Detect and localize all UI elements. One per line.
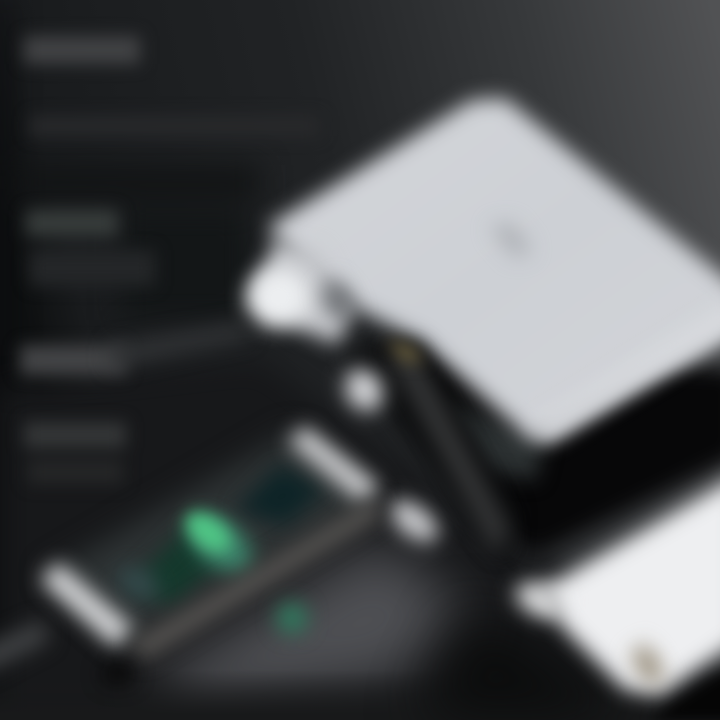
- paragraph block 4: [28, 460, 123, 484]
- phone shadow spot: [102, 664, 134, 684]
- charger plug: [246, 240, 360, 345]
- black corner: [650, 660, 720, 720]
- phone end cap right: [288, 425, 380, 505]
- diagonal cable with gold connector: [337, 340, 515, 560]
- second device at lower right: [510, 475, 720, 695]
- cable to the left: [110, 322, 250, 368]
- connector tip upper: [337, 362, 391, 418]
- phone screen: [235, 465, 325, 525]
- subheading block 4: [24, 422, 126, 448]
- paragraph block 1: [30, 116, 320, 136]
- charger body: [268, 98, 720, 445]
- connector tip lower: [383, 492, 445, 550]
- left column: blurred text blocks: [20, 36, 320, 484]
- subheading block 2: [26, 210, 118, 236]
- lower floor shading: [0, 360, 720, 720]
- green glow: [180, 505, 264, 585]
- lower left cable: [0, 620, 50, 676]
- dark band behind the left column: [0, 0, 260, 720]
- shadow under charger: [370, 350, 720, 555]
- paragraph block 2: [30, 250, 155, 286]
- subheading block 3: [20, 345, 126, 375]
- charger logo: [490, 222, 532, 258]
- charger front edge: [530, 295, 720, 445]
- phone: [40, 425, 384, 684]
- gold port: [627, 640, 669, 690]
- green reflection: [277, 603, 307, 633]
- phone long edge: [130, 500, 384, 662]
- heading block: [24, 36, 140, 64]
- phone end cap left: [40, 562, 134, 648]
